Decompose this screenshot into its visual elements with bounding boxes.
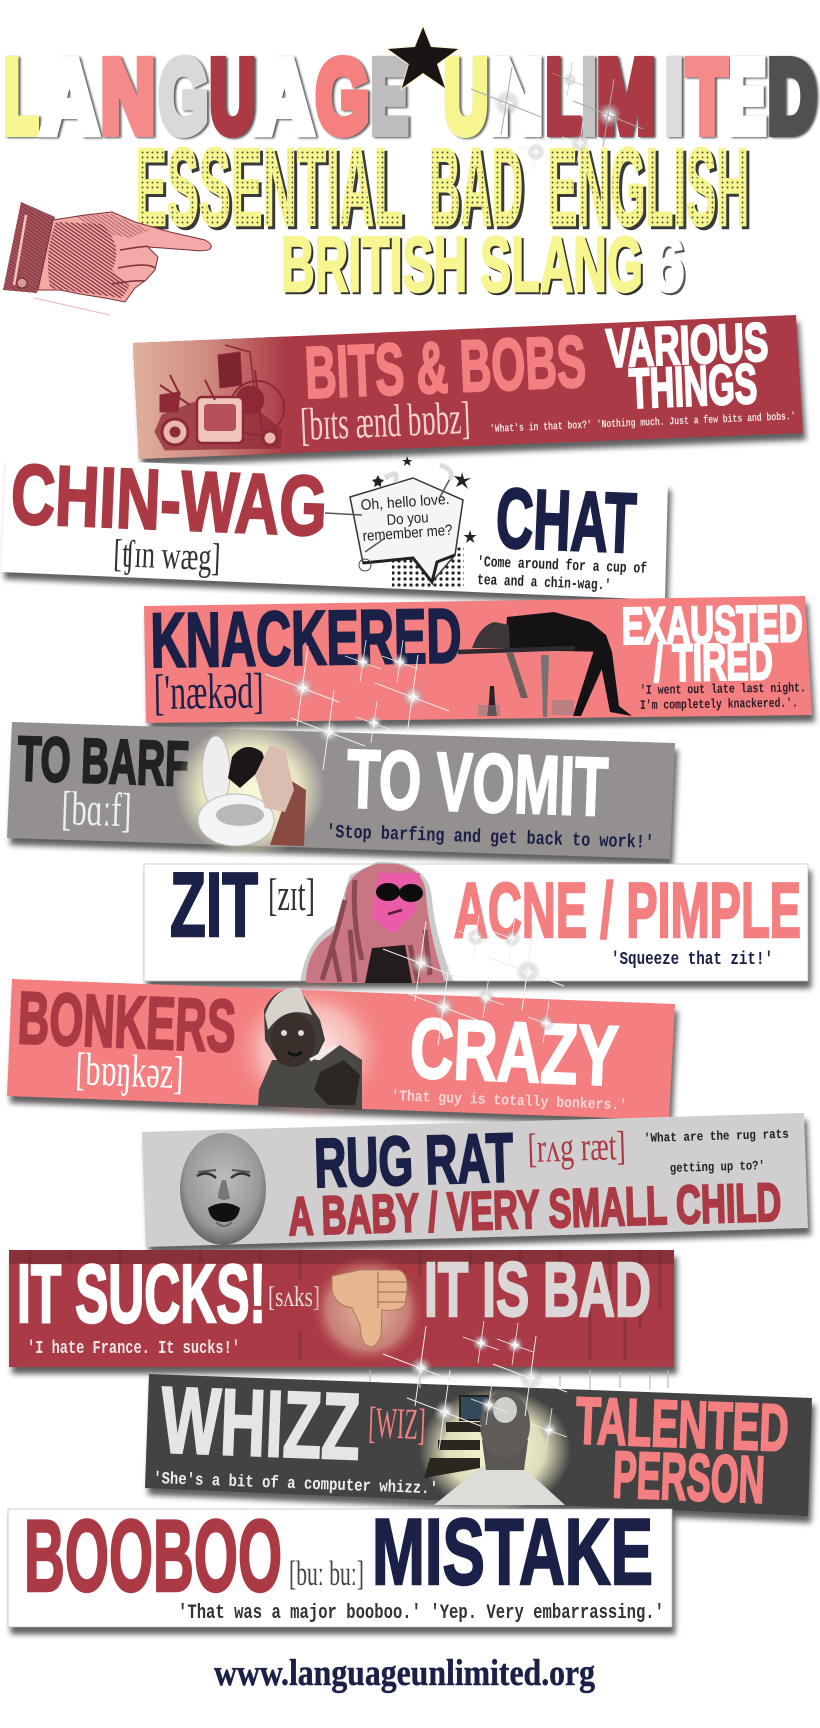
example sentence: 'She's a bit of a computer whizz.': [153, 1470, 438, 1499]
panel: chin-wag: [1, 447, 668, 600]
example sentence: tea and a chin-wag.': [477, 572, 611, 594]
subtitle: British Slang 6: 6: [653, 222, 687, 310]
image: crying baby: [180, 1133, 266, 1245]
phonetic: [bɪts ænd bɒbz]: [299, 392, 471, 450]
title: Language Unlimited: L: [546, 39, 580, 154]
subtitle: Essential Bad English: ESSENTIAL: [135, 126, 403, 249]
panel: whizz: [145, 1367, 812, 1517]
heading: Knackered: KNACKERED: [150, 593, 462, 684]
example sentence: [644, 1127, 789, 1176]
heading: Booboo: BOOBOO: [24, 1499, 282, 1613]
title: Language Unlimited: A: [256, 39, 313, 154]
title: Language Unlimited: U: [444, 39, 488, 154]
panel: zit: [144, 855, 808, 985]
title: Language Unlimited: E: [371, 39, 408, 154]
subtitle: Essential Bad English: ESSENTIAL: [138, 129, 406, 252]
heading: Rug rat: RUG RAT: [313, 1119, 514, 1202]
panel: booboo: [8, 1499, 672, 1627]
example sentence: 'Squeeze that zit!': [611, 950, 773, 970]
heading: Various Things: [605, 312, 769, 420]
phonetic: [WIZ]: [368, 1398, 426, 1449]
heading: Bits & Bobs: BITS & BOBS: [303, 321, 587, 414]
heading: Zit: ZIT: [170, 855, 258, 956]
icon: black star: [384, 24, 462, 91]
title: Language Unlimited: N: [490, 39, 543, 154]
example sentence: [640, 680, 806, 713]
title: Language Unlimited: T: [687, 39, 727, 154]
phonetic: [ʧɪn wæg]: [113, 532, 221, 579]
example sentence: [477, 554, 647, 594]
title: Language Unlimited: G: [159, 39, 208, 154]
example sentence: 'I hate France. It sucks!': [27, 1339, 240, 1359]
speech bubble: remember me?: [362, 522, 453, 545]
image: woman slumped on table: [458, 612, 632, 717]
heading: It is bad: IT IS BAD: [424, 1247, 651, 1333]
title: Language Unlimited: I: [582, 39, 596, 154]
example sentence: 'That guy is totally bonkers.': [391, 1088, 627, 1114]
panel: bonkers: [7, 976, 675, 1120]
title: Language Unlimited: U: [210, 39, 255, 154]
heading: Chin-wag: CHIN-WAG: [9, 447, 329, 555]
speech bubble: [325, 456, 476, 587]
title: Language Unlimited: M: [597, 39, 655, 154]
image: man at computer: [419, 1388, 571, 1512]
example sentence: 'What are the rug rats: [644, 1127, 789, 1146]
example sentence: 'Stop barfing and get back to work!': [326, 821, 654, 854]
panel: to barf: [7, 722, 675, 859]
phonetic: ['nækəd]: [153, 662, 264, 720]
image: man smoking: [230, 980, 390, 1120]
icon: pile of machines: [155, 345, 284, 450]
example sentence: 'Come around for a cup of: [477, 554, 647, 578]
heading: Talented person: [574, 1383, 790, 1517]
title: Language Unlimited: I: [665, 39, 683, 154]
image: woman with sunglasses: [300, 862, 455, 985]
image: woman vomiting in toilet: [175, 722, 325, 858]
heading: Exausted / Tired: [621, 595, 803, 693]
phonetic: [rʌg ræt]: [527, 1122, 626, 1171]
phonetic: [bɑːf]: [61, 782, 132, 837]
heading: It sucks!: IT SUCKS!: [17, 1247, 266, 1340]
subtitle: British Slang 6: 6: [651, 220, 685, 308]
phonetic: [buː buː]: [289, 1554, 364, 1593]
heading: Whizz: WHIZZ: [159, 1367, 362, 1479]
speech bubble: Do you: [386, 509, 429, 529]
title: Language Unlimited: L: [4, 39, 38, 154]
example sentence: 'That was a major booboo.' 'Yep. Very embarrassing.': [178, 1602, 664, 1625]
icon: thumbs down: [310, 1254, 426, 1366]
panel: bits and bobs: [133, 312, 803, 459]
subtitle: Essential Bad English: BAD: [429, 126, 523, 249]
icon: pointing hand: [3, 202, 211, 315]
decorative sparkles: [265, 62, 643, 1450]
panel: knackered: [144, 593, 812, 723]
example sentence: getting up to?': [670, 1158, 765, 1176]
heading: Crazy: CRAZY: [408, 1001, 620, 1104]
title: Language Unlimited: G: [316, 39, 369, 154]
speech bubble: Oh, hello love.: [360, 491, 450, 514]
panel: rug rat: [142, 1113, 808, 1247]
heading: To barf: TO BARF: [17, 724, 190, 800]
title: Language Unlimited: N: [101, 39, 155, 154]
heading: Mistake: MISTAKE: [372, 1499, 653, 1604]
subtitle: Essential Bad English: BAD: [432, 129, 526, 252]
heading: Chat: CHAT: [494, 471, 638, 572]
panel: it sucks: [9, 1247, 674, 1367]
title: Language Unlimited: A: [41, 39, 98, 154]
phonetic: [sʌks]: [268, 1282, 320, 1313]
heading: Bonkers: BONKERS: [16, 976, 238, 1068]
phonetic: [zɪt]: [268, 870, 315, 920]
phonetic: [bɒŋkəz]: [75, 1043, 185, 1098]
title: Language Unlimited: [4, 39, 816, 154]
title: Language Unlimited: E: [729, 39, 766, 154]
heading: To vomit: TO VOMIT: [345, 732, 609, 834]
website url: www.languageunlimited.org: [214, 1653, 595, 1694]
